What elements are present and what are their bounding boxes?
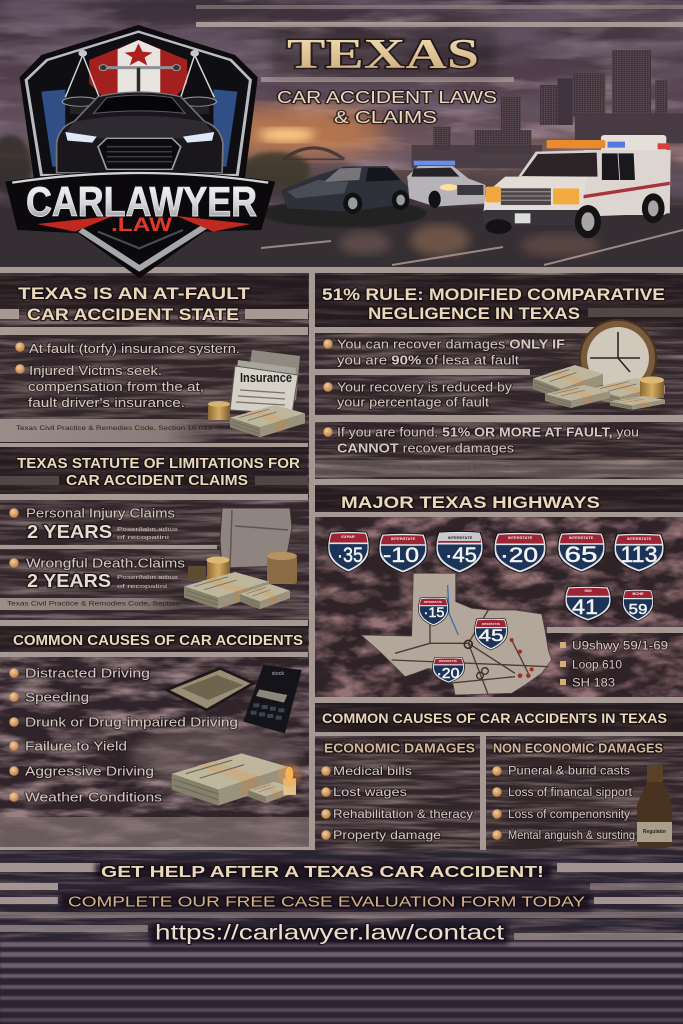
shield: 35	[328, 531, 369, 572]
shield: 65: INTERSTATE	[569, 535, 594, 540]
bottom stripes	[0, 850, 683, 1024]
column heading: ECONOMIC DAMAGES	[324, 742, 475, 756]
text: Loss of financal sipport	[508, 787, 633, 799]
legend text: Loop 610	[572, 660, 622, 672]
title: TEXAS	[287, 32, 479, 78]
legend swatch	[560, 679, 566, 685]
cta subheading: COMPLETE OUR FREE CASE EVALUATION FORM TODAY	[68, 894, 585, 910]
citation: Texas Civil Practice & Remodies Code, Section	[7, 600, 181, 608]
logo: CarLawyer.law shield	[5, 25, 275, 278]
dark heading bands	[0, 275, 683, 732]
text: CANNOT recover damages	[337, 442, 514, 456]
debris	[261, 199, 427, 227]
text: Failure to Yield	[25, 738, 127, 754]
shield: 41: 41	[572, 596, 598, 619]
shield: 65: 65	[564, 542, 598, 567]
shield: 113	[614, 533, 664, 572]
rock panels	[0, 517, 683, 847]
crashed car	[281, 166, 409, 214]
heading: COMMON CAUSES OF CAR ACCIDENTS IN TEXAS	[322, 710, 667, 726]
shield: 10	[379, 533, 427, 573]
legend text: SH 183	[572, 678, 615, 690]
bullet	[9, 692, 19, 702]
legend swatch	[560, 642, 566, 648]
heading: COMMON CAUSES OF CAR ACCIDENTS	[13, 633, 303, 649]
shield: 65	[558, 532, 605, 572]
shield: map 45: INTERSTATE	[482, 622, 500, 626]
bullet	[321, 809, 331, 819]
logo wordmark: CARLAWYER	[26, 178, 257, 225]
heading: MAJOR TEXAS HIGHWAYS	[341, 494, 600, 512]
shield: 20: INTERSTATE	[508, 535, 533, 540]
legend	[547, 627, 683, 690]
text: Lost wages	[333, 785, 407, 799]
illustration: clock and cash	[533, 320, 665, 410]
legend swatch	[560, 661, 566, 667]
bullet	[492, 809, 502, 819]
bullet	[15, 342, 25, 352]
text: Injured Victms seek.	[29, 364, 162, 378]
shield: 35: EXPAR	[341, 534, 355, 539]
shield: 59: BCHE	[632, 591, 644, 596]
text: Wrongful Death.Claims	[26, 556, 185, 570]
shield: 35: ·35	[337, 544, 363, 567]
shield: 45	[436, 531, 483, 573]
bullet	[15, 364, 25, 374]
illustration: map, cash, coins and mug	[184, 508, 297, 609]
shield: 20	[494, 532, 546, 573]
bullet	[9, 668, 19, 678]
heading: TEXAS IS AN AT-FAULT	[18, 284, 251, 303]
url: https://carlawyer.law/contact	[155, 922, 504, 944]
panel: at-fault state	[15, 284, 305, 437]
police SUV	[407, 161, 486, 208]
text: You can recover damages ONLY IF	[337, 338, 565, 352]
icon: bottle	[637, 765, 672, 848]
bullet	[9, 766, 19, 776]
text: Personal Injury Claims	[26, 506, 175, 520]
icon: scales	[65, 55, 214, 97]
heading: 51% RULE: MODIFIED COMPARATIVE	[322, 286, 665, 304]
illustration: insurance papers and cash: Insurance	[240, 370, 292, 385]
shield: map 20	[433, 657, 464, 683]
shield: map 20: INTERSTATE	[439, 659, 457, 663]
duration: 2 YEARS	[27, 522, 112, 542]
shield: 45: ·45	[445, 544, 477, 567]
shield: map 15: INTERSTATE	[424, 600, 442, 604]
shield: map 15: ·15	[424, 604, 445, 620]
text: your percentage of fault	[337, 396, 490, 410]
text: Drunk or Drug-impaired Driving	[25, 714, 238, 730]
bullet	[321, 766, 331, 776]
cause list	[9, 666, 238, 804]
shield: map 45	[475, 618, 507, 650]
text: Puneral & burid casts	[508, 766, 630, 778]
car	[57, 92, 223, 173]
subtitle: CAR ACCIDENT LAWS	[277, 87, 497, 107]
citation: TIM-KS Prexas Sections, Reasoladend & Reecode Rights	[333, 466, 532, 472]
bullet	[9, 717, 19, 727]
panel: major highways	[328, 494, 683, 695]
bullet	[492, 766, 502, 776]
text: Rehabilitation & theracy	[333, 807, 473, 821]
shield: 10: -10	[383, 544, 419, 567]
panel: common causes	[9, 633, 303, 805]
cta heading: GET HELP AFTER A TEXAS CAR ACCIDENT!	[101, 864, 544, 881]
illustration: insurance papers and cash	[208, 350, 305, 437]
panel: damages	[321, 710, 672, 848]
text: fault driver's insurance.	[28, 396, 185, 410]
duration: 2 YEARS	[27, 571, 111, 591]
icon: star	[125, 43, 152, 65]
legend text: U9shwy 59/1-69	[572, 640, 668, 652]
note: Poserðalın adıus	[117, 526, 178, 533]
note: Poserðalın adıus	[117, 574, 178, 581]
road	[0, 208, 683, 267]
text: Mental anguish & sursting	[508, 830, 635, 842]
bullet	[321, 787, 331, 797]
heading line 2: CAR ACCIDENT CLAIMS	[66, 473, 248, 489]
text: Speeding	[25, 690, 89, 704]
text: Your recovery is reduced by	[337, 380, 513, 394]
trees	[0, 135, 32, 195]
bullet	[321, 830, 331, 840]
highway shields row	[328, 531, 664, 683]
bullet	[492, 830, 502, 840]
text: Property damage	[333, 828, 441, 842]
bullet	[323, 382, 333, 392]
call to action	[60, 863, 590, 945]
title block	[272, 30, 497, 127]
column heading: NON ECONOMIC DAMAGES	[493, 742, 663, 756]
shield: 45: INTERSTATE	[448, 535, 473, 540]
text: Weather Conditions	[25, 790, 163, 804]
text: you are 90% of lesa at fault	[337, 354, 520, 368]
shield: map 15	[419, 597, 448, 626]
heading line 2: NEGLIGENCE IN TEXAS	[368, 305, 580, 323]
banner	[5, 171, 275, 278]
shield: 113: 113	[620, 542, 658, 567]
text: Distracted Driving	[25, 666, 150, 680]
skyline	[283, 50, 683, 168]
panel: 51% rule	[322, 286, 665, 472]
text: Medical bills	[333, 764, 412, 778]
bullet	[323, 427, 333, 437]
text: compensation from the at,	[28, 380, 204, 394]
shield: map 20: ·20	[436, 665, 460, 682]
ambulance	[483, 135, 671, 238]
panel: header scene	[0, 0, 683, 270]
bullet	[9, 558, 19, 568]
bullet	[9, 792, 19, 802]
shield: 10: INTERSTATE	[391, 536, 416, 541]
shield: 59	[623, 589, 653, 621]
text: Aggressive Driving	[25, 764, 154, 778]
logo suffix: .LAW	[111, 215, 172, 236]
note line 2: of recopatini	[117, 535, 169, 541]
vehicles	[261, 135, 671, 238]
shield: 113: INTERSTATE	[627, 536, 652, 541]
shield: map 45: 45	[478, 626, 504, 645]
illustration: booklet, calculator, cash, candle	[167, 665, 302, 805]
bullet	[9, 741, 19, 751]
text: If you are found. 51% OR MORE AT FAULT, you	[337, 426, 639, 440]
shield: 59: 59	[628, 601, 648, 618]
bullet	[492, 787, 502, 797]
shield: 41: ISM	[584, 588, 592, 593]
panel: statute of limitations	[7, 456, 301, 609]
citation: Texas Civil Practice & Remedies Code, Section 16.033	[16, 425, 213, 432]
bullet	[9, 508, 19, 518]
icon: bottle: Regulator	[643, 829, 666, 835]
subtitle line 2: & CLAIMS	[334, 107, 437, 127]
shield: 20: ·20	[500, 544, 538, 567]
illustration: booklet, calculator, cash, candle: stock	[272, 671, 284, 677]
heading line 2: CAR ACCIDENT STATE	[27, 305, 239, 324]
note line 2: of recopatini	[117, 584, 167, 590]
heading: TEXAS STATUTE OF LIMITATIONS FOR	[17, 456, 301, 472]
text: At fault (torfy) insurance systern.	[29, 342, 240, 356]
text: Loss of compenonsnity	[508, 809, 630, 821]
map: Texas	[361, 573, 552, 695]
shield: 41	[565, 586, 611, 621]
bullet	[323, 339, 333, 349]
